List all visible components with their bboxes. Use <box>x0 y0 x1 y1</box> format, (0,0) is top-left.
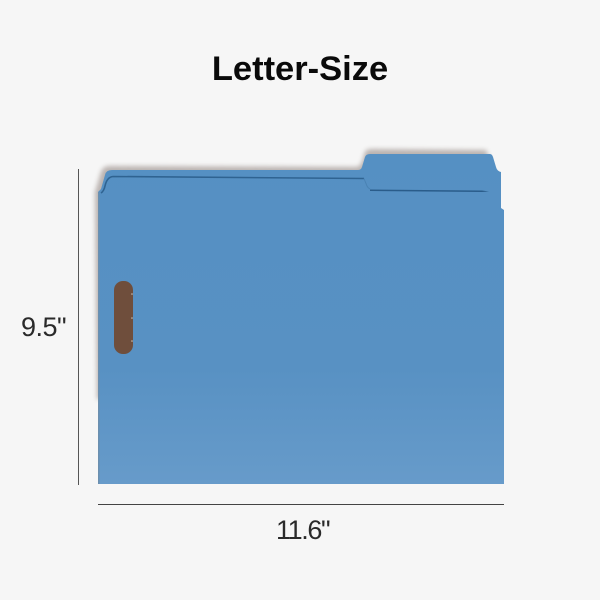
tab left edge <box>364 178 370 189</box>
fastener <box>114 281 133 354</box>
left edge shade <box>98 192 100 484</box>
title: Letter-Size <box>212 50 388 88</box>
height label: 9.5" <box>21 312 66 342</box>
folder <box>98 154 504 484</box>
tab slit <box>370 190 489 192</box>
front pocket fold line <box>101 176 364 193</box>
width line <box>98 504 504 505</box>
folder shadow <box>95 149 490 400</box>
width label: 11.6" <box>276 515 329 545</box>
height line <box>78 169 79 485</box>
folder body <box>98 154 504 484</box>
